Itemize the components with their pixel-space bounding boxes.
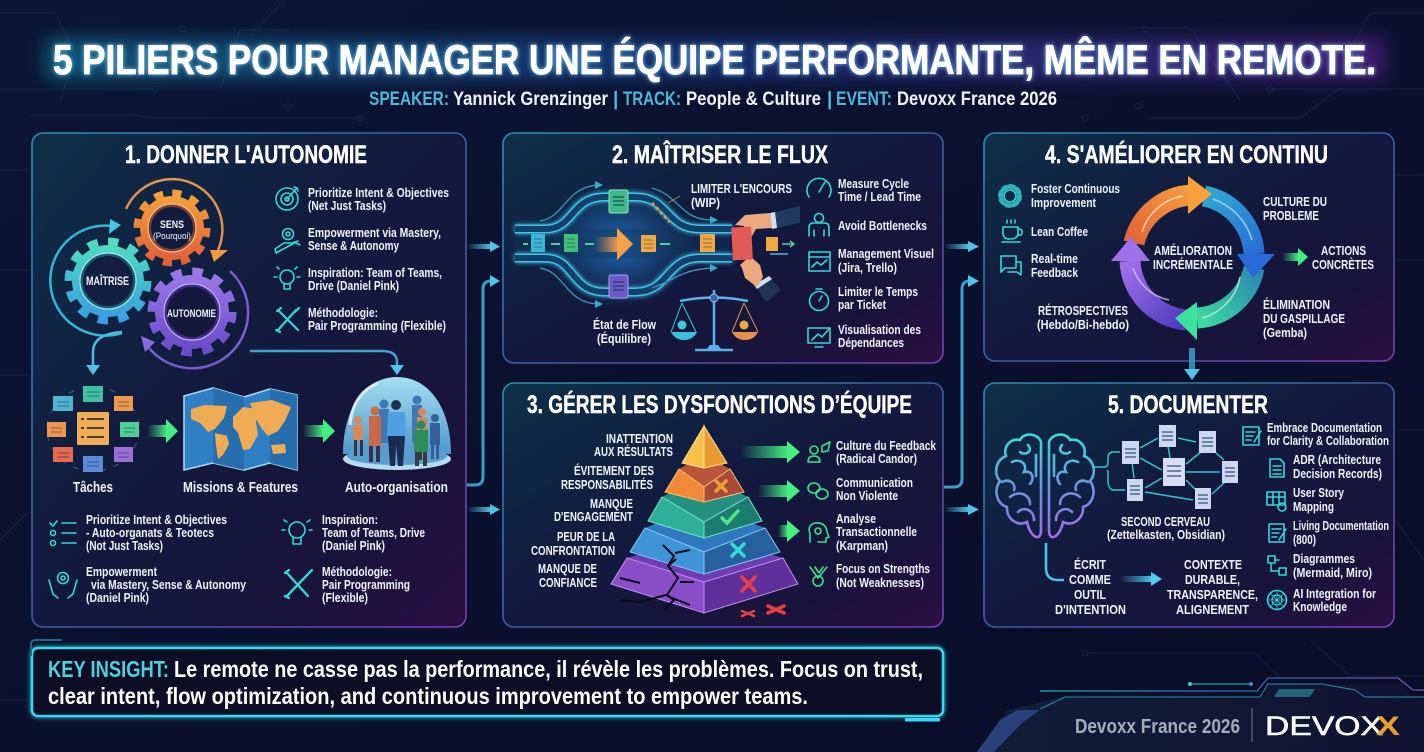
diagram: world map bbox=[184, 388, 297, 470]
text: feedback: Culture du Feedback bbox=[836, 438, 937, 453]
text: methodologie: Pair Programming (Flexible) bbox=[308, 318, 446, 333]
label: actions: CONCRÈTES bbox=[1312, 257, 1374, 272]
text: ai integration: AI Integration for bbox=[1293, 586, 1376, 601]
icon: bulb bbox=[274, 267, 300, 289]
gear: autonomie bbox=[141, 271, 248, 368]
text: lower prioritize: (Not Just Tasks) bbox=[86, 538, 163, 553]
label: contexte: TRANSPARENCE, bbox=[1167, 587, 1258, 602]
text: lower prioritize: - Auto-organats & Teotecs bbox=[86, 525, 214, 540]
gear: maitrise bbox=[50, 219, 147, 336]
footer plate bbox=[977, 678, 1424, 752]
labels: pyramid levels: INATTENTION bbox=[606, 431, 673, 446]
logo: devoxx: DEVOX bbox=[1265, 711, 1383, 741]
label: retrospectives: (Hebdo/Bi-hebdo) bbox=[1037, 317, 1129, 332]
heading 1: 1. DONNER L'AUTONOMIE bbox=[125, 141, 367, 169]
text: prioritize: Prioritize Intent & Objectives bbox=[308, 185, 449, 200]
icon: gear outline bbox=[1000, 186, 1020, 206]
label: ecrit: ÉCRIT bbox=[1074, 557, 1106, 572]
labels: pyramid levels: RESPONSABILITÉS bbox=[561, 477, 653, 492]
arrow: writing to context bbox=[1120, 572, 1162, 586]
text: methodologie bbox=[308, 305, 446, 333]
text: lower methodologie bbox=[322, 564, 410, 605]
label: waste: DU GASPILLAGE bbox=[1263, 311, 1345, 326]
label: culture bbox=[1263, 194, 1327, 223]
arrow: tasks to missions bbox=[147, 419, 178, 443]
text: inspiration: Inspiration: Team of Teams, bbox=[308, 265, 442, 280]
text: adr: Decision Records) bbox=[1293, 466, 1382, 481]
label: second brain: SECOND CERVEAU bbox=[1121, 514, 1210, 529]
accent: callout tab bbox=[905, 718, 940, 722]
icon: checklist bbox=[50, 521, 76, 546]
text: insight line 1: KEY INSIGHT: bbox=[48, 656, 169, 682]
text: embrace bbox=[1267, 420, 1389, 448]
text: visual management bbox=[838, 246, 934, 275]
label: ecrit: OUTIL bbox=[1074, 587, 1106, 602]
icon: edit note bbox=[1243, 427, 1261, 445]
label: flow state bbox=[593, 317, 657, 346]
text: strengths: Focus on Strengths bbox=[836, 561, 930, 576]
subtitle: People & Culture bbox=[686, 89, 821, 110]
label: culture: CULTURE DU bbox=[1263, 194, 1327, 209]
text: real-time bbox=[1031, 251, 1079, 280]
text: cnv: Non Violente bbox=[836, 488, 898, 503]
text: ai integration bbox=[1293, 586, 1376, 614]
text: lower methodologie: (Flexible) bbox=[322, 590, 368, 605]
text: visual management: (Jira, Trello) bbox=[838, 260, 897, 275]
text: lower inspiration: (Daniel Pink) bbox=[322, 538, 385, 553]
icon: lower bulb bbox=[282, 520, 312, 544]
text: living documentation bbox=[1293, 518, 1389, 547]
diagram: tasks bbox=[47, 386, 139, 472]
text: diagrammes: (Mermaid, Miro) bbox=[1293, 565, 1372, 580]
icon: tools bbox=[276, 308, 299, 332]
arrow: missions to autonomy bbox=[303, 419, 335, 443]
text: cnv: Communication bbox=[836, 475, 913, 490]
title glow bbox=[45, 38, 1385, 80]
icon: hands holding wip limit bbox=[731, 206, 800, 302]
gear: autonomie: AUTONOMIE bbox=[167, 308, 216, 320]
text: real-time: Real-time bbox=[1031, 251, 1078, 266]
text: measure: Measure Cycle bbox=[838, 176, 909, 191]
text: measure: Time / Lead Time bbox=[838, 189, 921, 204]
text: inspiration bbox=[308, 265, 442, 293]
logo: devoxx: X bbox=[1376, 711, 1400, 741]
label: missions: Missions & Features bbox=[183, 480, 298, 496]
label: culture: PROBLEME bbox=[1263, 208, 1319, 223]
label: actions: ACTIONS bbox=[1321, 243, 1366, 258]
label: waste: ÉLIMINATION bbox=[1263, 297, 1330, 312]
text: limit time: Limiter le Temps bbox=[838, 284, 918, 299]
text: embrace: Embrace Documentation bbox=[1267, 420, 1382, 435]
subtitle bbox=[369, 89, 1057, 110]
label: contexte: ALIGNEMENT bbox=[1176, 602, 1249, 617]
panel 2: maitriser le flux bbox=[503, 133, 943, 363]
text: limit time bbox=[838, 284, 918, 312]
icon: head bbox=[809, 523, 829, 542]
subtitle: TRACK: bbox=[623, 89, 681, 110]
subtitle: Yannick Grenzinger bbox=[453, 89, 609, 110]
text: prioritize bbox=[308, 185, 449, 213]
text: prioritize: (Net Just Tasks) bbox=[308, 198, 386, 213]
text: diagrammes bbox=[1293, 551, 1372, 580]
chart: improvement cycle bbox=[1111, 176, 1275, 340]
labels: pyramid levels: CONFRONTATION bbox=[531, 543, 615, 558]
text: dependencies: Visualisation des bbox=[838, 322, 921, 337]
icon: lower tools bbox=[285, 570, 312, 598]
label: flow state: (Équilibre) bbox=[597, 331, 651, 346]
gear: sens bbox=[126, 179, 228, 262]
text: adr: ADR (Architecture bbox=[1293, 452, 1381, 467]
icon: doc bbox=[1270, 459, 1284, 477]
text: karpman bbox=[836, 511, 917, 553]
label: ecrit: D'INTENTION bbox=[1055, 602, 1126, 617]
gear: maitrise: MAÎTRISE bbox=[86, 275, 129, 288]
arrows: green remedies bbox=[740, 441, 800, 542]
text: diagrammes: Diagrammes bbox=[1293, 551, 1355, 566]
label: cycle centre: AMÉLIORATION bbox=[1154, 243, 1232, 258]
text: empowerment: Sense & Autonomy bbox=[308, 238, 400, 253]
label: contexte bbox=[1167, 557, 1258, 617]
label: taches: Tâches bbox=[73, 480, 113, 496]
heading 3: 3. GÉRER LES DYSFONCTIONS D’ÉQUIPE bbox=[527, 390, 912, 419]
text: user story bbox=[1293, 485, 1345, 514]
text: living documentation: (800) bbox=[1293, 532, 1316, 547]
icon: chart monitor bbox=[808, 328, 830, 347]
icon: hand gear bbox=[275, 228, 300, 253]
labels: pyramid levels: MANQUE bbox=[590, 496, 633, 511]
text: empowerment bbox=[308, 225, 441, 253]
text: lower inspiration: Team of Teams, Drive bbox=[322, 525, 425, 540]
text: user story: User Story bbox=[1293, 485, 1345, 500]
text: lower empowerment: Empowerment bbox=[86, 564, 158, 579]
text: karpman: Transactionnelle bbox=[836, 524, 917, 539]
text: cnv bbox=[836, 475, 913, 503]
text: inspiration: Drive (Daniel Pink) bbox=[308, 278, 399, 293]
text: lower empowerment bbox=[86, 564, 247, 605]
icon: person bbox=[809, 214, 829, 236]
icon: ai network bbox=[1268, 590, 1286, 610]
labels: pyramid levels: AUX RÉSULTATS bbox=[594, 444, 673, 459]
label: waste bbox=[1263, 297, 1345, 340]
heading 4: 4. S'AMÉLIORER EN CONTINU bbox=[1045, 140, 1328, 169]
label: contexte: CONTEXTE bbox=[1184, 557, 1242, 572]
label: cycle centre: INCRÉMENTALE bbox=[1153, 257, 1233, 272]
label: waste: (Gemba) bbox=[1263, 325, 1307, 340]
text: dependencies: Dépendances bbox=[838, 335, 904, 350]
heading 5: 5. DOCUMENTER bbox=[1108, 391, 1268, 419]
labels: pyramid levels: ÉVITEMENT DES bbox=[574, 463, 654, 478]
text: insight line 2: clear intent, flow optimization, and continuous improvement to empower teams. bbox=[48, 683, 808, 709]
text: methodologie: Méthodologie: bbox=[308, 305, 378, 320]
icon: diagram bbox=[1268, 556, 1286, 575]
text: ai integration: Knowledge bbox=[1293, 599, 1347, 614]
label: cycle centre bbox=[1153, 243, 1233, 272]
icon: coffee bbox=[1002, 220, 1022, 242]
text: lower prioritize: Prioritize Intent & Objectives bbox=[86, 512, 227, 527]
subtitle: SPEAKER: bbox=[369, 89, 449, 110]
panel 4: s'ameliorer en continu bbox=[984, 133, 1394, 361]
labels: pyramid levels: CONFIANCE bbox=[539, 575, 597, 590]
text: adr bbox=[1293, 452, 1382, 481]
icon: stopwatch bbox=[810, 289, 828, 310]
label: contexte: DURABLE, bbox=[1185, 572, 1240, 587]
label: retrospectives: RÉTROSPECTIVES bbox=[1038, 303, 1128, 318]
text: lower methodologie: Méthodologie: bbox=[322, 564, 392, 579]
text: foster bbox=[1031, 181, 1120, 210]
panel 1: donner l'autonomie bbox=[32, 133, 466, 627]
text: strengths bbox=[836, 561, 930, 590]
arrow: panel 4 to panel 5 bbox=[1184, 348, 1200, 380]
labels: pyramid levels: PEUR DE LA bbox=[557, 529, 615, 544]
labels: pyramid levels: MANQUE DE bbox=[538, 561, 597, 576]
label: auto-organisation: Auto-organisation bbox=[345, 480, 448, 496]
label: wip bbox=[691, 181, 792, 210]
text: bottlenecks: Avoid Bottlenecks bbox=[838, 218, 927, 233]
icon: story map bbox=[1267, 492, 1286, 511]
text: karpman: (Karpman) bbox=[836, 538, 888, 553]
arrow: gears to tasks bbox=[86, 332, 122, 375]
arrow: gears to self-organisation bbox=[250, 351, 404, 375]
icon: board bbox=[809, 252, 830, 271]
text: lower inspiration bbox=[322, 512, 425, 553]
label: actions bbox=[1312, 243, 1374, 272]
text: real-time: Feedback bbox=[1031, 265, 1079, 280]
text: insight line 1: Le remote ne casse pas la performance, il révèle les problèmes. Focus on trust, bbox=[174, 656, 923, 682]
text: measure bbox=[838, 176, 921, 204]
subtitle: EVENT: bbox=[836, 89, 892, 110]
arrow: to actions bbox=[1282, 248, 1308, 266]
icon: balance scale bbox=[671, 290, 758, 350]
callout: key insight bbox=[31, 640, 943, 716]
label: flow state: État de Flow bbox=[593, 317, 657, 332]
text: feedback: (Radical Candor) bbox=[836, 451, 917, 466]
diagram: note network bbox=[1094, 425, 1238, 509]
panel 3: gerer les dysfonctions bbox=[503, 383, 943, 627]
icon: living doc bbox=[1269, 524, 1286, 542]
text: limit time: par Ticket bbox=[838, 297, 887, 312]
heading 2: 2. MAÎTRISER LE FLUX bbox=[612, 139, 828, 169]
text: embrace: for Clarity & Collaboration bbox=[1267, 433, 1389, 448]
diagram: flow pipes bbox=[515, 181, 794, 308]
icon: target bbox=[276, 187, 298, 210]
panel 5: documenter bbox=[984, 383, 1394, 627]
label: wip: (WIP) bbox=[691, 195, 720, 210]
text: feedback bbox=[836, 438, 937, 466]
subtitle: | bbox=[613, 89, 618, 110]
label: second brain bbox=[1107, 514, 1225, 542]
label: ecrit: COMME bbox=[1069, 572, 1111, 587]
gear: sens: SENS bbox=[160, 219, 184, 231]
icon: chat bbox=[1001, 256, 1021, 275]
chart: lencioni pyramid bbox=[611, 426, 798, 616]
text: lower empowerment: (Daniel Pink) bbox=[86, 590, 149, 605]
icon: gauge bbox=[807, 178, 831, 197]
arrow: brain to writing bbox=[1046, 543, 1064, 580]
text: strengths: (Not Weaknesses) bbox=[836, 575, 924, 590]
icon: people feedback bbox=[808, 442, 830, 462]
text: karpman: Analyse bbox=[836, 511, 876, 526]
text: lower empowerment: via Mastery, Sense & Autonomy bbox=[91, 577, 247, 592]
text: lower inspiration: Inspiration: bbox=[322, 512, 378, 527]
gear: sens: (Pourquoi) bbox=[153, 231, 191, 242]
labels: pyramid levels: D'ENGAGEMENT bbox=[554, 509, 633, 524]
diagram: team dome bbox=[343, 377, 451, 470]
text: user story: Mapping bbox=[1293, 499, 1334, 514]
text: lower methodologie: Pair Programming bbox=[322, 577, 410, 592]
label: second brain: (Zettelkasten, Obsidian) bbox=[1107, 527, 1225, 542]
text: empowerment: Empowerment via Mastery, bbox=[308, 225, 441, 240]
label: wip: LIMITER L'ENCOURS bbox=[691, 181, 792, 196]
icon: medal bbox=[810, 567, 827, 586]
subtitle: | bbox=[827, 89, 832, 110]
subtitle: Devoxx France 2026 bbox=[897, 89, 1057, 110]
icon: chat bubbles bbox=[808, 483, 828, 499]
labels: pyramid levels bbox=[531, 431, 673, 590]
text: dependencies bbox=[838, 322, 921, 350]
text: lower prioritize bbox=[86, 512, 227, 553]
icon: hands gear bbox=[49, 572, 77, 598]
text: visual management: Management Visuel bbox=[838, 246, 934, 261]
icon: brain bbox=[996, 435, 1094, 537]
text: foster: Foster Continuous bbox=[1031, 181, 1120, 196]
text: foster: Improvement bbox=[1031, 195, 1097, 210]
text: lean coffee: Lean Coffee bbox=[1031, 224, 1088, 239]
arrows: panel connectors bbox=[467, 241, 979, 515]
label: retrospectives bbox=[1037, 303, 1129, 332]
label: ecrit bbox=[1055, 557, 1126, 617]
text: event name: Devoxx France 2026 bbox=[1075, 716, 1240, 738]
